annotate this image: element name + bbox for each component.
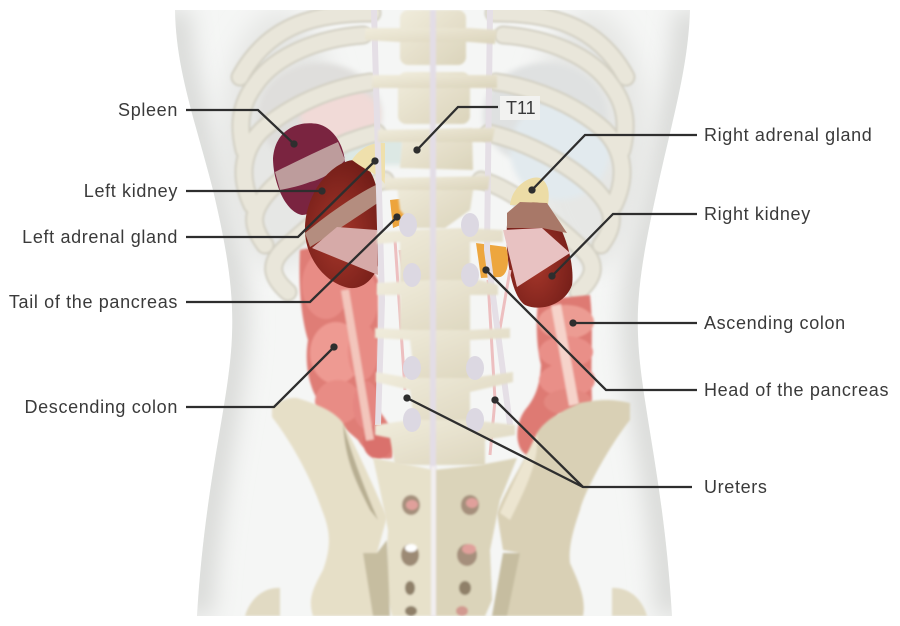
- right adrenal gland: [510, 178, 549, 205]
- ureters and vessels: [395, 240, 510, 455]
- leader line: Right kidney: [550, 214, 697, 278]
- leader line: Right adrenal gland: [530, 135, 697, 192]
- leader line: Left kidney: [186, 188, 324, 194]
- label: Ascending colon: Ascending colon: [704, 313, 846, 333]
- central spinal cord line: [430, 10, 436, 616]
- descending colon: [299, 247, 393, 459]
- leader line: T11: [414, 107, 498, 152]
- sacrum: [373, 458, 517, 616]
- left hip bone: [272, 398, 390, 616]
- leader line: Descending colon: [186, 344, 336, 407]
- label: Head of the pancreas: Head of the pancreas: [704, 380, 889, 400]
- diaphragm and inner abdomen: [258, 63, 610, 200]
- body silhouette: [170, 0, 700, 626]
- label: Right adrenal gland: Right adrenal gland: [704, 125, 872, 145]
- lumbar vertebrae: [375, 228, 515, 465]
- spleen: [273, 123, 345, 215]
- ascending colon: [517, 295, 595, 455]
- vertebra T9: [365, 10, 497, 65]
- left adrenal gland: [352, 143, 385, 184]
- label: Spleen: Spleen: [118, 100, 178, 120]
- vertebra T10: [372, 72, 497, 124]
- tail of the pancreas: [390, 198, 405, 228]
- head of the pancreas: [476, 243, 508, 278]
- right hip bone: [492, 400, 630, 616]
- label: Descending colon: Descending colon: [24, 397, 178, 417]
- label: Left adrenal gland: Left adrenal gland: [22, 227, 178, 247]
- sacral foramina: [401, 495, 479, 616]
- rib cage: [240, 13, 626, 292]
- label: Left kidney: Left kidney: [84, 181, 178, 201]
- intervertebral discs: [399, 213, 484, 432]
- right kidney: [503, 202, 573, 308]
- femur heads: [245, 588, 647, 616]
- vertebra T12: [385, 176, 490, 228]
- left kidney: [305, 160, 382, 288]
- leader line: Head of the pancreas: [484, 268, 697, 390]
- label: Ureters: Ureters: [704, 477, 768, 497]
- leader line: Spleen: [186, 110, 296, 146]
- leader lines: Ureters: [404, 396, 692, 487]
- label: Right kidney: Right kidney: [704, 204, 811, 224]
- leader line: Ascending colon: [570, 320, 697, 326]
- leader line: Left adrenal gland: [186, 158, 378, 237]
- label: Tail of the pancreas: Tail of the pancreas: [9, 292, 178, 312]
- vertebra T11: [378, 128, 495, 170]
- leader line: Tail of the pancreas: [186, 214, 400, 302]
- vertebral column: [366, 10, 516, 468]
- T11 label background: [500, 96, 540, 120]
- label: T11: T11: [506, 98, 536, 118]
